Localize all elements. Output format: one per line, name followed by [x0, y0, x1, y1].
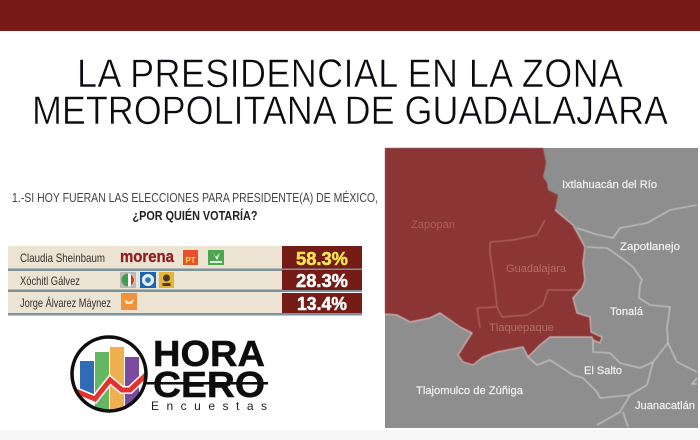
map labels: Guadalajara [506, 263, 567, 275]
row: Claudia Sheinbaum [8, 246, 362, 271]
value: 58.3%: 58.3% [296, 248, 348, 269]
row: Jorge Álvarez Máynez [8, 292, 362, 316]
row: Claudia Sheinbaum: Claudia Sheinbaum [20, 251, 105, 265]
logo: PAN [140, 272, 156, 288]
logo: Movimiento Ciudadano [121, 293, 137, 310]
title: LA PRESIDENCIAL EN LA ZONA [77, 52, 624, 96]
map labels: Zapopan [411, 219, 455, 231]
map labels: Tlajomulco de Zúñiga [416, 385, 524, 397]
map labels: Ixtlahuacán del Río [562, 179, 657, 191]
map boundaries [528, 205, 697, 427]
logo wordmark: CERO [153, 364, 265, 405]
top banner [0, 0, 700, 31]
title [32, 52, 669, 133]
map labels: El Salto [584, 365, 622, 377]
logo: PT: PT [185, 256, 196, 265]
value: 13.4%: 13.4% [297, 293, 347, 314]
question text: ¿POR QUIÉN VOTARÍA? [132, 208, 258, 223]
logo tagline: Encuestas [151, 399, 267, 413]
row: Xóchitl Gálvez: Xóchitl Gálvez [20, 274, 80, 288]
map region: metropolitan zone [385, 148, 602, 365]
logo: PRD [159, 272, 174, 288]
question text: 1.-SI HOY FUERAN LAS ELECCIONES PARA PRESIDENTE(A) DE MÉXICO, [12, 190, 378, 205]
map labels [411, 179, 695, 412]
results table [8, 246, 362, 316]
logo icon: chart in circle [71, 336, 148, 412]
map labels: Tonalá [610, 306, 644, 318]
logo: Hora Cero Encuestas [71, 333, 268, 413]
row: Xóchitl Gálvez [8, 270, 362, 292]
value: 13.4% [282, 293, 362, 314]
value: 28.3% [282, 270, 362, 291]
logo wordmark [146, 333, 268, 405]
logo: PT [183, 250, 198, 265]
map labels: Zapotlanejo [620, 241, 680, 253]
map [385, 148, 698, 428]
map region outline [385, 210, 602, 365]
map labels: Juanacatlán [635, 400, 695, 412]
logo: Verde [208, 250, 224, 265]
value: 28.3%: 28.3% [296, 270, 348, 291]
logo: morena: morena [120, 247, 174, 266]
row: Jorge Álvarez Máynez: Jorge Álvarez Máynez [20, 295, 111, 310]
title: METROPOLITANA DE GUADALAJARA [32, 89, 669, 133]
value: 58.3% [282, 246, 362, 269]
map labels: Tlaquepaque [489, 322, 554, 334]
question text [12, 190, 378, 223]
logo: PRI [120, 272, 136, 288]
logo wordmark: HORA [153, 333, 265, 374]
